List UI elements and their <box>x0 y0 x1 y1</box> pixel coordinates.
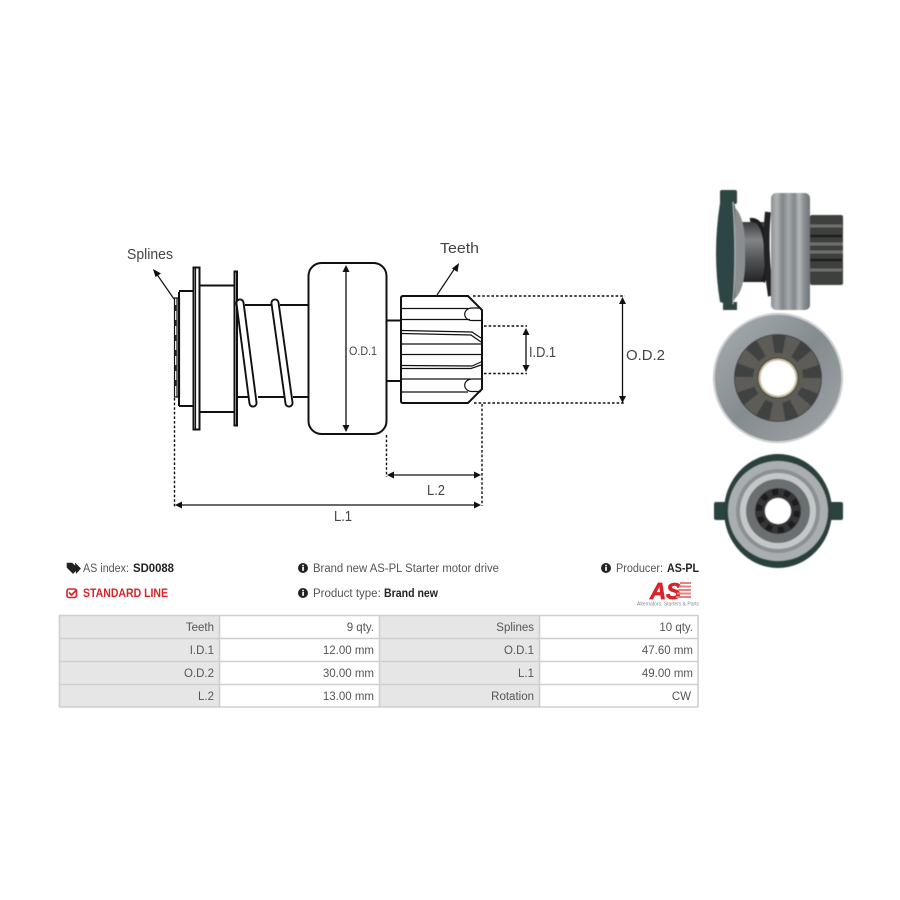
text: AS index label: AS index: <box>83 563 129 575</box>
table row: teeth and splines: Splines <box>496 622 534 634</box>
arrow: splines pointer <box>153 269 174 299</box>
label: I.D.1: I.D.1 <box>529 344 556 361</box>
photo: spline end view <box>714 454 843 568</box>
dimension: L.2 arrow <box>387 472 481 478</box>
part: spring coils <box>240 303 289 403</box>
info row: producer <box>601 563 699 575</box>
icon: tags <box>67 563 80 574</box>
table row: L.2 and rotation: L.2 <box>198 691 214 703</box>
dimension: L.1 arrow <box>175 502 481 508</box>
dimension: O.D.1 arrow <box>342 265 350 432</box>
icon: info <box>298 563 308 573</box>
label: O.D.1: O.D.1 <box>349 346 377 358</box>
table row: teeth and splines: 9 qty. <box>347 622 374 634</box>
text: producer: Producer: <box>616 563 663 575</box>
icon: info <box>298 588 308 598</box>
table row: O.D.2 and L.1: 30.00 mm <box>323 668 374 680</box>
table row: I.D.1 and O.D.1: I.D.1 <box>190 645 214 657</box>
label: L.2: L.2 <box>427 482 445 499</box>
part: splined end <box>174 298 180 397</box>
photo: pinion end view <box>713 313 843 443</box>
text: AS index value: SD0088 <box>133 563 175 575</box>
table: specifications <box>59 615 698 707</box>
label: O.D.2: O.D.2 <box>626 347 665 364</box>
part: shaft <box>237 305 308 397</box>
info row: standard line <box>67 588 168 600</box>
text: brand new: Brand new <box>384 588 438 600</box>
table row: O.D.2 and L.1: 49.00 mm <box>642 668 693 680</box>
table row: I.D.1 and O.D.1: 12.00 mm <box>323 645 374 657</box>
label: L.1: L.1 <box>334 508 352 525</box>
info row: AS index <box>67 563 175 575</box>
table row: teeth and splines: Teeth <box>186 622 214 634</box>
info row: brand new description <box>298 563 499 575</box>
photo: side view of drive <box>716 190 843 310</box>
part: clutch body <box>308 263 386 434</box>
text: product type: Product type: <box>313 588 381 600</box>
icon: red check box <box>67 589 77 598</box>
table row: L.2 and rotation: Rotation <box>491 691 534 703</box>
table row: L.2 and rotation <box>198 691 691 703</box>
table row: I.D.1 and O.D.1: O.D.1 <box>504 645 534 657</box>
icon: info <box>601 563 611 573</box>
logo: AS: Alternators, Starters & Parts <box>637 602 699 608</box>
part: pinion gear <box>401 296 482 403</box>
logo: AS: AS <box>649 578 682 604</box>
diagram: starter drive technical drawing <box>127 240 665 525</box>
label: Teeth: Teeth <box>440 240 479 257</box>
table row: O.D.2 and L.1: L.1 <box>518 668 534 680</box>
table row: teeth and splines <box>186 622 693 634</box>
info row: product type <box>298 588 438 600</box>
arrow: teeth pointer <box>437 263 459 295</box>
part: collar and flanges <box>179 268 237 430</box>
table row: O.D.2 and L.1: O.D.2 <box>184 668 214 680</box>
part: neck <box>387 320 401 381</box>
text: description: Brand new AS-PL Starter motor drive <box>313 563 499 575</box>
table row: L.2 and rotation: 13.00 mm <box>323 691 374 703</box>
logo: AS <box>637 578 699 608</box>
text: STANDARD LINE: STANDARD LINE <box>83 588 168 600</box>
table row: L.2 and rotation: CW <box>672 691 691 703</box>
table row: O.D.2 and L.1 <box>184 668 693 680</box>
label: Splines: Splines <box>127 246 173 263</box>
table row: I.D.1 and O.D.1 <box>190 645 693 657</box>
dimension: O.D.2 arrow <box>619 297 626 403</box>
table backgrounds <box>59 615 698 707</box>
table row: teeth and splines: 10 qty. <box>659 622 693 634</box>
table row: I.D.1 and O.D.1: 47.60 mm <box>642 645 693 657</box>
dimension: I.D.1 arrow <box>522 328 530 372</box>
dimension lines: dashed extension lines <box>174 296 625 508</box>
text: AS-PL: AS-PL <box>667 563 699 575</box>
